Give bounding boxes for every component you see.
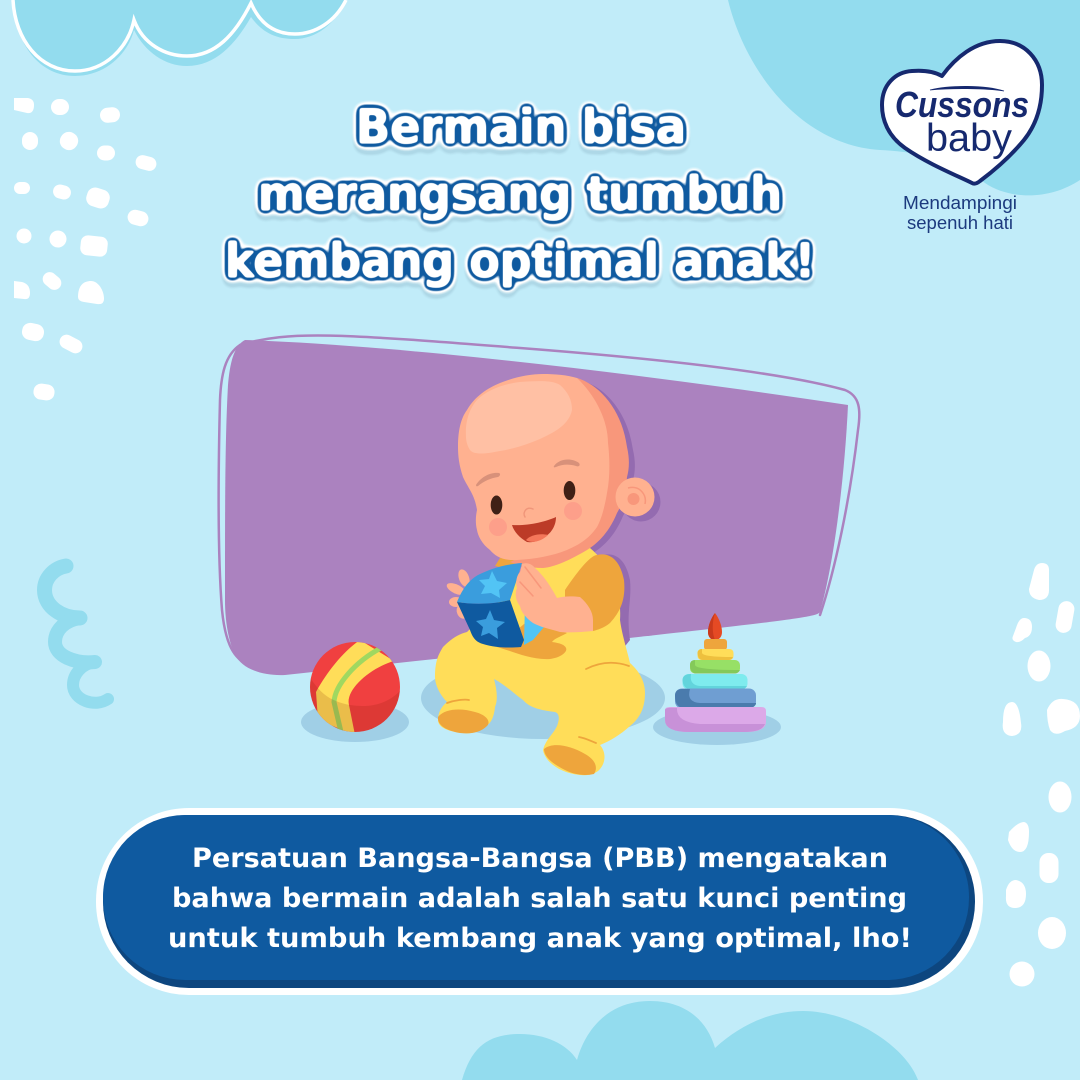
head highlight — [466, 381, 572, 454]
eyes — [491, 481, 575, 514]
title: merangsang tumbuh — [258, 167, 782, 222]
top right blob — [728, 0, 1080, 195]
stacking ring toy — [665, 613, 766, 732]
title: kembang optimal anak! — [225, 234, 815, 289]
logo: sepenuh hati — [907, 213, 1013, 233]
face — [458, 374, 609, 560]
orange collar behind chin — [495, 558, 525, 570]
logo word: Cussons: Cussons — [895, 84, 1029, 125]
logo tagline: Mendampingi — [903, 193, 1017, 213]
right white dots — [1003, 563, 1080, 986]
callout text: bahwa bermain adalah salah satu kunci penting — [172, 883, 907, 914]
baby — [435, 374, 660, 775]
title: Bermain bisa — [356, 100, 686, 155]
logo word: baby: baby — [926, 117, 1012, 160]
left white dots — [14, 98, 158, 401]
squiggle decoration — [44, 566, 108, 703]
toy block — [457, 563, 544, 648]
bottom cloud — [462, 1001, 918, 1080]
far hand fingers — [445, 568, 472, 620]
floor shadows — [301, 657, 781, 745]
right foot sole — [544, 745, 596, 775]
callout text: Persatuan Bangsa-Bangsa (PBB) mengatakan — [192, 843, 888, 874]
top left cloud — [13, 0, 346, 76]
logo heart — [882, 41, 1042, 184]
title — [225, 100, 815, 289]
star on top face — [479, 571, 507, 598]
suit creases — [447, 663, 629, 743]
logo — [882, 41, 1042, 233]
orange shade beneath the block — [497, 620, 567, 659]
star on front face — [476, 610, 505, 639]
bottom callout — [96, 808, 983, 995]
near arm and hand — [516, 563, 593, 632]
logo swoosh — [930, 86, 1004, 91]
head back — [510, 378, 629, 568]
callout text — [168, 843, 912, 954]
left foot sole — [438, 709, 488, 733]
mouth — [512, 517, 556, 542]
body suit — [435, 548, 645, 775]
ball toy — [310, 642, 400, 732]
ear — [616, 478, 654, 516]
purple backdrop shape — [219, 335, 859, 675]
callout text: untuk tumbuh kembang anak yang optimal, lho! — [168, 923, 912, 954]
orange sleeve — [565, 554, 624, 631]
nose — [524, 508, 533, 517]
eyebrows — [476, 460, 580, 486]
baby purple drop shadow — [516, 381, 660, 650]
cheeks — [489, 502, 582, 536]
